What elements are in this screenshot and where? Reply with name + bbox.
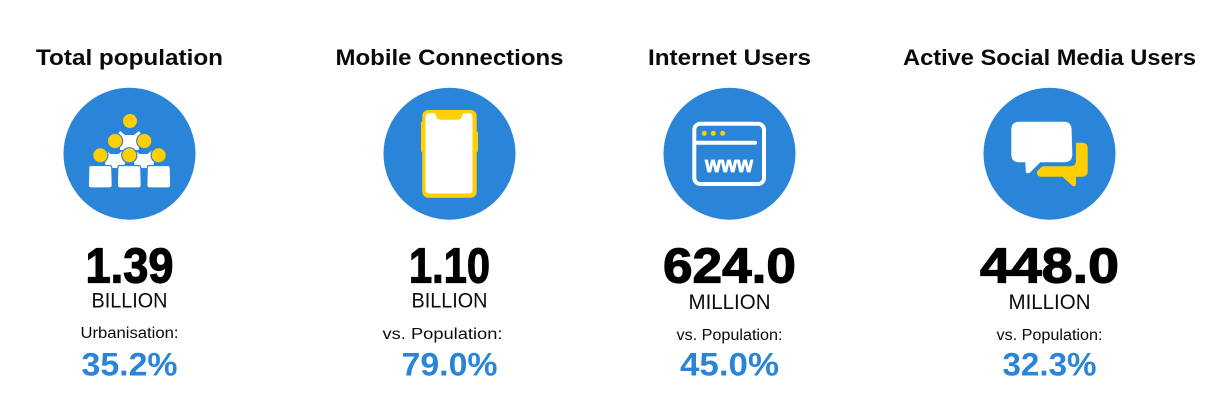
- unit: billion: BILLION: [92, 290, 168, 312]
- panel: mobile connections: [336, 45, 564, 382]
- value: 1.10 billion: 1.10: [409, 240, 490, 294]
- value: 624.0 million: 624.0: [663, 240, 796, 294]
- label: vs. population: vs. Population:: [382, 326, 502, 343]
- value: 448.0 million: 448.0: [980, 240, 1119, 294]
- icon: browser window: [664, 88, 796, 220]
- icon: browser window: www: [704, 152, 754, 177]
- value: 1.39 billion: 1.39: [86, 240, 174, 294]
- heading: internet users: Internet Users: [648, 45, 811, 70]
- heading: mobile connections: Mobile Connections: [336, 45, 564, 70]
- percentage: 79.0%: 79.0%: [402, 346, 498, 382]
- icon: speech bubbles: [984, 88, 1116, 220]
- label: urbanisation: Urbanisation:: [80, 325, 178, 342]
- unit: million: MILLION: [688, 291, 770, 314]
- icon: smartphone: [384, 88, 516, 220]
- percentage: 32.3%: 32.3%: [1002, 346, 1096, 382]
- unit: billion: BILLION: [412, 290, 488, 312]
- unit: million: MILLION: [1008, 291, 1090, 314]
- panel: total population: [36, 45, 223, 382]
- panel: active social media users: [903, 45, 1196, 382]
- label: vs. population: vs. Population:: [996, 327, 1102, 344]
- heading: total population: Total population: [36, 45, 223, 70]
- percentage: 35.2%: 35.2%: [82, 346, 178, 382]
- heading: active social media users: Active Social Media Users: [903, 45, 1196, 70]
- panel: internet users: [648, 45, 811, 382]
- label: vs. population: vs. Population:: [676, 327, 782, 344]
- percentage: 45.0%: 45.0%: [680, 346, 779, 382]
- icon: group of people: [64, 88, 196, 220]
